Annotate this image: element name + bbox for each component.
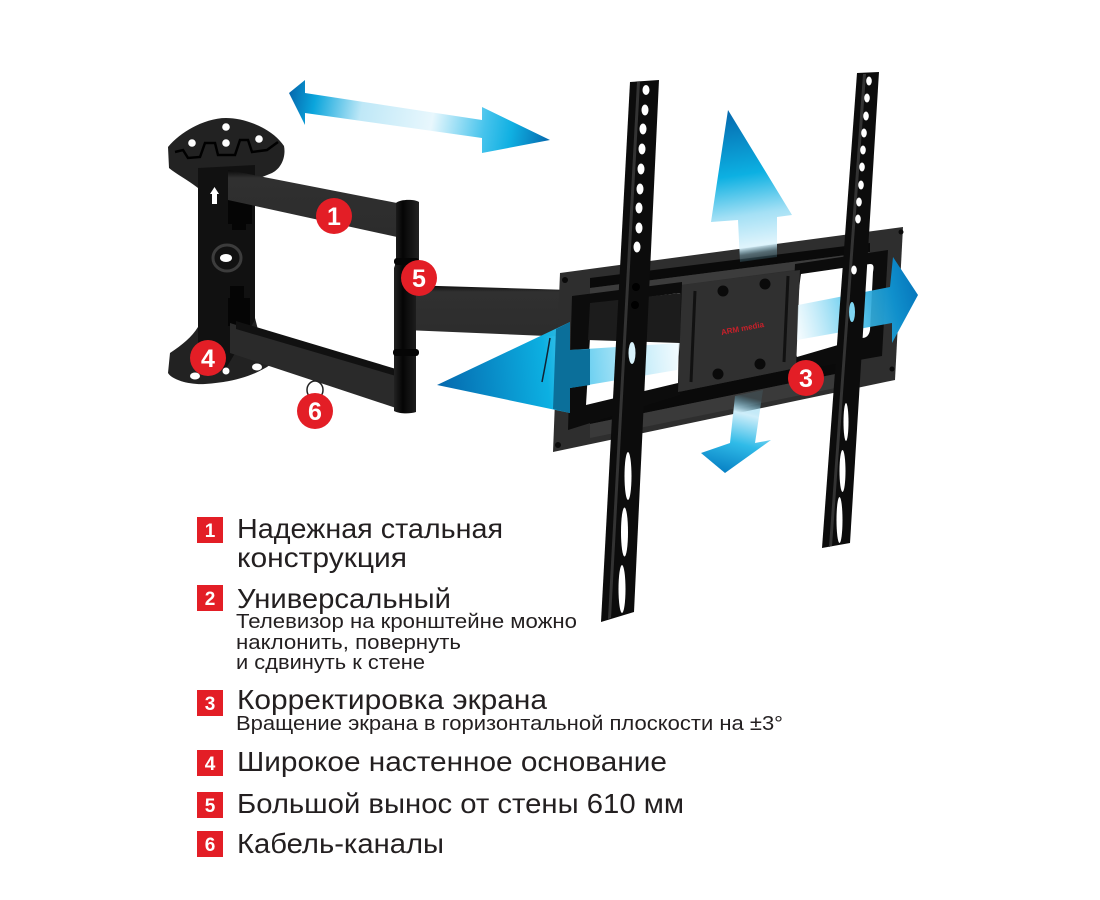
dark body bbox=[198, 165, 255, 370]
right arrow bbox=[797, 257, 918, 343]
down arrow bbox=[701, 390, 771, 473]
rail holes bbox=[618, 85, 650, 613]
rail highlight bbox=[829, 74, 866, 547]
legend item 6: Кабель-каналы bbox=[237, 828, 444, 859]
arm seen in left window bbox=[588, 293, 681, 343]
lower arm bbox=[230, 323, 396, 408]
legend item 4: 4 bbox=[205, 754, 216, 775]
left window bbox=[586, 293, 680, 405]
wall mount bracket bbox=[168, 118, 284, 384]
marker 1: 1 bbox=[327, 203, 341, 231]
marker 4 bbox=[190, 340, 226, 376]
legend item 1: Надежная стальная bbox=[237, 513, 503, 544]
legend item 3: Вращение экрана в горизонтальной плоскости на ±3° bbox=[236, 712, 783, 735]
legend item 3: Корректировка экрана bbox=[237, 684, 548, 715]
rail bolts bbox=[631, 283, 640, 309]
column rings bbox=[393, 258, 419, 356]
centre plate bbox=[678, 270, 800, 392]
VESA screws bbox=[712, 278, 770, 380]
legend item 2: Универсальный bbox=[237, 583, 451, 614]
left arrow bbox=[437, 322, 680, 413]
legend item 2 bbox=[197, 583, 577, 674]
upper arm bbox=[228, 170, 397, 237]
legend item 3 bbox=[197, 684, 783, 735]
plate outer bbox=[553, 227, 903, 452]
wall plate body bbox=[168, 118, 284, 384]
cable tie bbox=[542, 338, 550, 382]
wall plate grooves bbox=[175, 140, 278, 158]
wall plate holes bbox=[188, 123, 263, 379]
bottom grey band bbox=[590, 369, 860, 438]
pivot column bbox=[394, 200, 419, 413]
legend item 2: и сдвинуть к стене bbox=[236, 651, 425, 674]
left window ring bbox=[568, 282, 682, 430]
centre slots bbox=[691, 276, 788, 382]
left vertical rail bbox=[601, 80, 659, 622]
marker 4: 4 bbox=[201, 345, 215, 373]
marker 1 bbox=[316, 198, 352, 234]
lower arm dark stripe bbox=[236, 321, 396, 376]
legend item 2: Телевизор на кронштейне можно bbox=[236, 610, 577, 633]
brand logo: ARM media bbox=[720, 320, 765, 337]
double arrow: swing left-right bbox=[289, 80, 550, 153]
legend item 3: 3 bbox=[205, 694, 215, 715]
legend item 1: 1 bbox=[205, 521, 216, 542]
rail body bbox=[822, 72, 879, 548]
legend item 2: наклонить, повернуть bbox=[236, 631, 461, 654]
bottom black stripe bbox=[590, 355, 860, 424]
marker 5 bbox=[401, 260, 437, 296]
double arrow: up-down bbox=[701, 110, 792, 473]
up arrow bbox=[711, 110, 792, 262]
long arm bbox=[405, 285, 690, 342]
right window bbox=[796, 264, 874, 357]
rail holes bbox=[836, 76, 872, 543]
legend item 5: Большой вынос от стены 610 мм bbox=[237, 788, 684, 819]
marker 5: 5 bbox=[412, 265, 426, 293]
centre boss bbox=[213, 245, 241, 271]
double arrow: left-right over plate bbox=[437, 257, 918, 413]
legend item 1: конструкция bbox=[237, 542, 407, 573]
marker 6: 6 bbox=[308, 398, 322, 426]
marker 3: 3 bbox=[799, 365, 813, 393]
legend item 2: 2 bbox=[205, 589, 215, 610]
legend item 4: Широкое настенное основание bbox=[237, 746, 667, 777]
left arrow part over plate bbox=[553, 322, 590, 413]
marker 6 bbox=[297, 393, 333, 429]
cable clip bbox=[307, 381, 323, 399]
rail highlight bbox=[608, 82, 640, 619]
top grey band bbox=[590, 252, 870, 297]
right window ring bbox=[790, 250, 888, 372]
marker 3 bbox=[788, 360, 824, 396]
legend item 6: 6 bbox=[205, 835, 215, 856]
corner screws bbox=[555, 230, 904, 448]
legend item 5: 5 bbox=[205, 796, 216, 817]
top black stripe bbox=[590, 243, 870, 288]
right vertical rail bbox=[822, 72, 879, 548]
TV plate bbox=[553, 227, 904, 452]
pivots bbox=[228, 200, 252, 326]
folding arms and column bbox=[228, 170, 690, 413]
rail body bbox=[601, 80, 659, 622]
legend item 1 bbox=[197, 513, 503, 573]
